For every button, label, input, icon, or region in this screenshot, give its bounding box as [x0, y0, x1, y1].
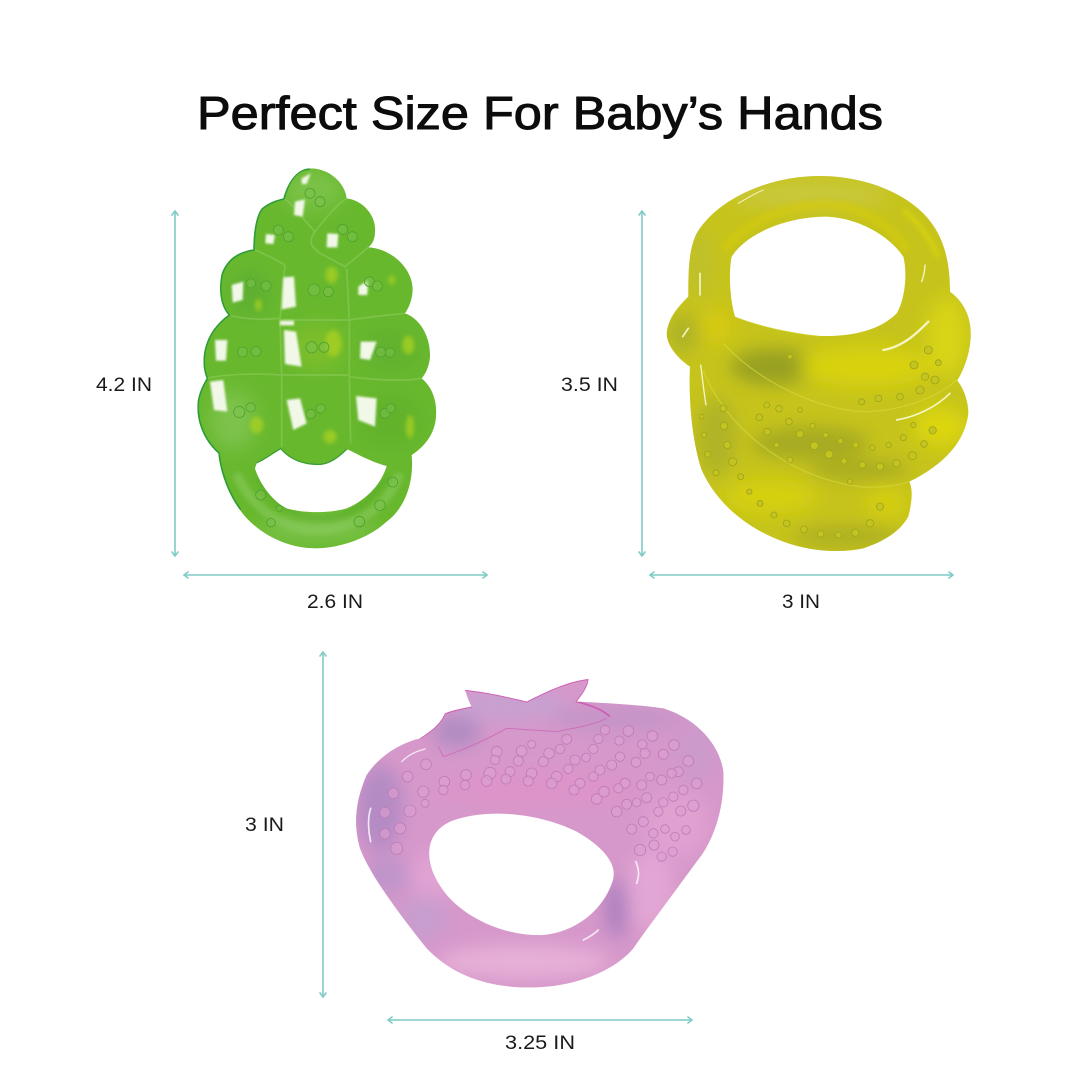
shading — [668, 180, 967, 548]
bumps — [699, 346, 941, 538]
label: 4.2 IN: 4.2 IN — [96, 375, 152, 396]
label: 3.25 IN: 3.25 IN — [505, 1033, 575, 1054]
yellow glints — [250, 267, 414, 443]
label: 3 IN: 3 IN — [782, 592, 820, 613]
dimension: yellow width arrow — [650, 572, 953, 578]
label: 3 IN (height): 3 IN — [245, 815, 284, 836]
label: 3.5 IN: 3.5 IN — [561, 375, 618, 396]
calyx edge — [420, 679, 610, 738]
dimension: pink height arrow — [320, 652, 326, 997]
teether: green leaf — [197, 168, 436, 548]
handle glow — [723, 205, 907, 250]
lobe shading — [206, 168, 374, 546]
dimension: green width arrow — [184, 572, 487, 578]
dimension: yellow height arrow — [639, 211, 645, 556]
highlights — [210, 173, 377, 430]
shading — [357, 688, 720, 978]
lobe seams — [207, 198, 422, 447]
highlights — [369, 749, 639, 940]
title: Perfect Size For Baby’s Hands — [197, 87, 883, 139]
bumps — [380, 725, 702, 861]
highlights — [683, 190, 950, 420]
edge — [197, 168, 310, 510]
label: 2.6 IN: 2.6 IN — [307, 592, 363, 613]
dimension: green height arrow — [172, 211, 178, 556]
dimension: pink width arrow — [388, 1017, 692, 1023]
teether: pink strawberry — [350, 675, 725, 995]
teether: yellow banana bunch — [660, 170, 980, 560]
banana ridges — [703, 317, 958, 487]
bumps — [234, 188, 398, 527]
ring — [237, 473, 400, 530]
